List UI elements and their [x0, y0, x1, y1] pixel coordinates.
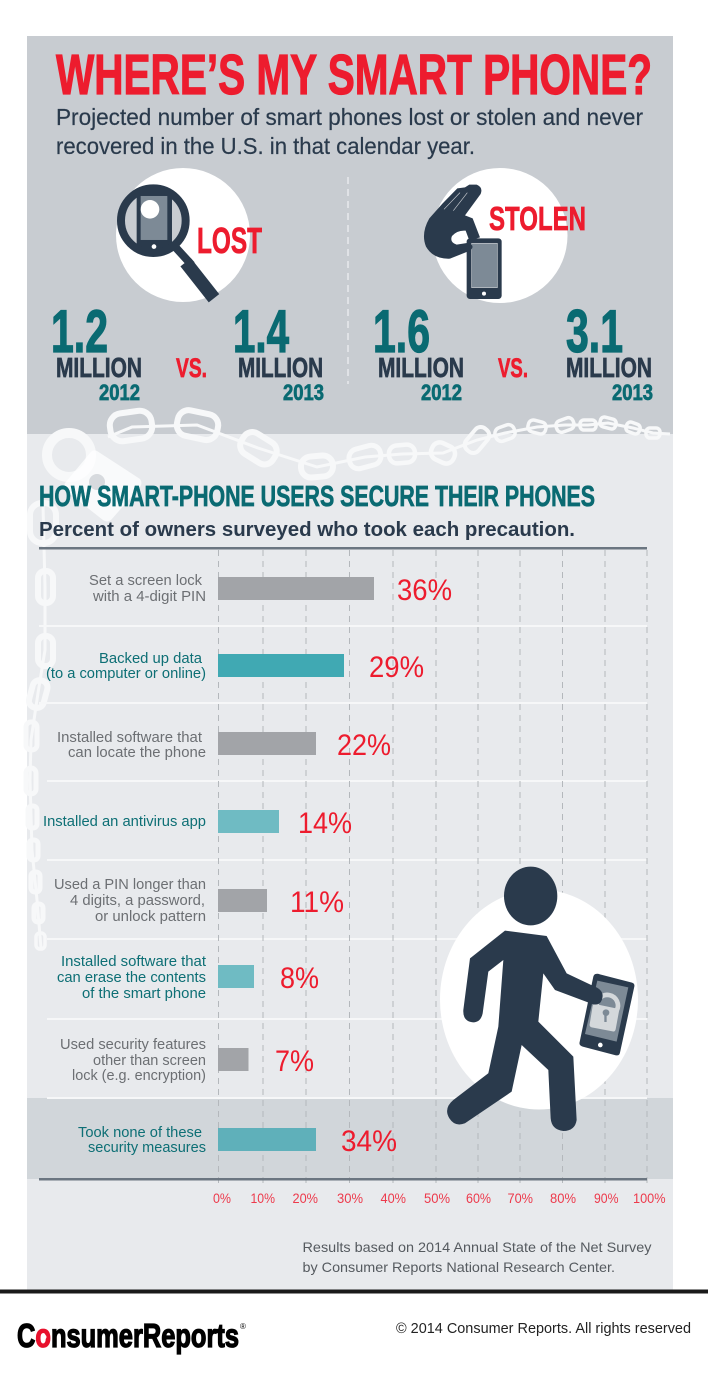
- x-axis labels: 90%: [594, 1190, 618, 1206]
- logo: Consumer Reports: ConsumerReports: [17, 1317, 239, 1354]
- x-axis labels: 10%: [250, 1190, 275, 1206]
- stats: stolen 2012: 1.6: [373, 298, 430, 365]
- stats: lost 2012: 1.2: [51, 298, 108, 365]
- decorative chain and padlock: [26, 408, 670, 949]
- row: backed up 29%: [46, 651, 424, 684]
- x-axis labels: 30%: [337, 1190, 363, 1206]
- row: antivirus 14%: [43, 807, 352, 840]
- row: erase contents 8%: of the smart phone: [82, 986, 206, 1002]
- x-axis labels: 70%: [508, 1190, 533, 1206]
- panel: lower background: [27, 434, 673, 1290]
- copyright: © 2014 Consumer Reports. All rights reserved: [396, 1321, 691, 1337]
- row: longer PIN 11%: [54, 877, 344, 925]
- chart: precautions bar chart: [39, 547, 666, 1206]
- source note: Results based on 2014 Annual State of the Net Survey: [302, 1239, 652, 1255]
- label: LOST: LOST: [197, 220, 262, 261]
- row: erase contents 8%: 8%: [280, 962, 319, 995]
- x-axis labels: 0%: [213, 1190, 231, 1206]
- icon: white circle behind walking figure: [440, 890, 638, 1110]
- subheading: Percent of owners surveyed who took each precaution.: [39, 519, 575, 541]
- x-axis labels: 50%: [424, 1190, 450, 1206]
- icon: hand taking phone: [424, 185, 502, 299]
- subtitle: [56, 104, 643, 159]
- row: locate phone 22%: Installed software that: [57, 730, 202, 746]
- row: screen lock 36%: [89, 573, 452, 607]
- row: longer PIN 11%: Used a PIN longer than: [54, 877, 206, 893]
- row: erase contents 8%: Installed software that: [61, 954, 206, 970]
- row: backed up 29%: 29%: [369, 651, 424, 684]
- label: stolen vs: VS.: [498, 353, 528, 383]
- x-axis labels: [213, 1190, 666, 1206]
- row: none 34%: Took none of these: [78, 1125, 202, 1141]
- row: locate phone 22%: [57, 729, 391, 762]
- stats: stolen 2013: 3.1: [566, 298, 623, 365]
- row: none 34%: [78, 1125, 397, 1158]
- x-axis labels: 60%: [466, 1190, 491, 1206]
- stats: lost 2013: 1.4: [233, 298, 289, 365]
- x-axis labels: 20%: [292, 1190, 318, 1206]
- row: longer PIN 11%: or unlock pattern: [95, 909, 206, 925]
- row: erase contents 8%: can erase the contents: [57, 970, 206, 986]
- band: none of these row background: [27, 1098, 673, 1179]
- stats: lost 2012: 2012: [99, 380, 140, 405]
- row: screen lock 36%: with a 4-digit PIN: [92, 589, 206, 605]
- stats: lost 2013: [233, 298, 324, 405]
- subtitle: recovered in the U.S. in that calendar year.: [56, 133, 475, 159]
- divider: [347, 177, 349, 384]
- x-axis labels: 80%: [550, 1190, 576, 1206]
- row: erase contents 8%: [57, 954, 319, 1002]
- row: other features 7%: 7%: [275, 1045, 314, 1078]
- stats: stolen 2013: MILLION: [566, 352, 652, 383]
- stats: lost 2013: MILLION: [238, 352, 323, 383]
- panel: top background: [27, 36, 673, 434]
- row: none 34%: 34%: [341, 1125, 397, 1158]
- row: backed up 29%: (to a computer or online): [46, 666, 206, 682]
- subtitle: Projected number of smart phones lost or stolen and never: [56, 104, 643, 130]
- stats: lost 2013: 2013: [283, 380, 324, 405]
- x-axis labels: 100%: [633, 1190, 666, 1206]
- icon: white circle behind magnifier: [116, 168, 250, 302]
- source note: [302, 1239, 652, 1275]
- row: antivirus 14%: Installed an antivirus app: [43, 814, 206, 830]
- icon: magnifying glass over phone: [121, 182, 214, 298]
- logo: Consumer Reports: ®: [240, 1322, 246, 1331]
- stats: lost 2012: MILLION: [56, 352, 142, 383]
- row: other features 7%: [60, 1037, 314, 1084]
- row: other features 7%: lock (e.g. encryption): [72, 1068, 206, 1084]
- source note: by Consumer Reports National Research Center.: [302, 1259, 615, 1275]
- row: backed up 29%: Backed up data: [99, 651, 203, 667]
- row: screen lock 36%: Set a screen lock: [89, 573, 203, 589]
- row: none 34%: security measures: [88, 1140, 206, 1156]
- stats: stolen 2013: [566, 298, 653, 405]
- stats: lost 2012: [51, 298, 142, 405]
- x-axis labels: 40%: [380, 1190, 406, 1206]
- stats: stolen 2013: 2013: [612, 380, 653, 405]
- row: longer PIN 11%: 4 digits, a password,: [70, 893, 205, 909]
- footer rule: [0, 1290, 708, 1294]
- label: lost vs: VS.: [176, 353, 207, 383]
- stats: stolen 2012: MILLION: [378, 352, 464, 383]
- icon: walking person with locked phone: [447, 867, 634, 1131]
- row: other features 7%: Used security features: [60, 1037, 206, 1053]
- label: STOLEN: STOLEN: [489, 200, 586, 237]
- row: longer PIN 11%: 11%: [290, 886, 344, 919]
- stats: stolen 2012: 2012: [421, 380, 462, 405]
- row: locate phone 22%: can locate the phone: [68, 745, 206, 761]
- row: other features 7%: other than screen: [93, 1053, 206, 1069]
- stats: stolen 2012: [373, 298, 464, 405]
- icon: white circle behind hand: [432, 168, 568, 303]
- row: screen lock 36%: 36%: [397, 574, 452, 607]
- row: locate phone 22%: 22%: [337, 729, 391, 762]
- row: antivirus 14%: 14%: [298, 807, 352, 840]
